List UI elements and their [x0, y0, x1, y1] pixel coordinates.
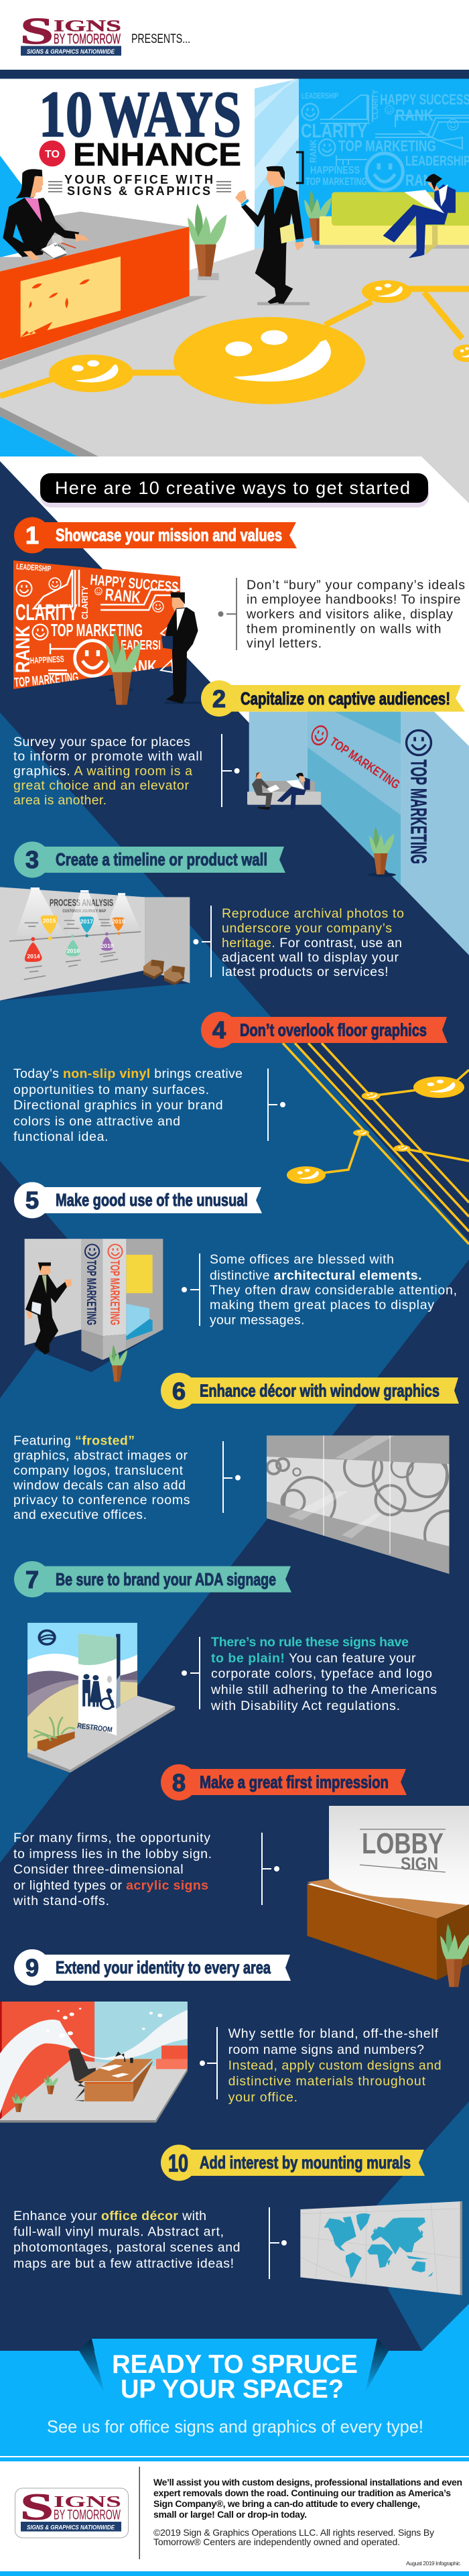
step 1 illustration: vinyl letter wall: RANK: [12, 625, 34, 673]
step 2 text: [13, 735, 202, 808]
step 10 text: full-wall vinyl murals. Abstract art,: [13, 2225, 224, 2240]
footer message: small or large! Call or drop-in today.: [153, 2509, 307, 2520]
step 9 text: [228, 2026, 442, 2105]
main title: YOUR OFFICE WITH: [64, 173, 213, 186]
step 4 connector: [267, 1068, 285, 1141]
year markers: 2016: [67, 947, 80, 954]
process analysis heading: PROCESS ANALYSIS: [50, 898, 113, 909]
footer logo card: SIGNS & GRAPHICS NATIONWIDE: [27, 2524, 115, 2531]
step 3 connector: [193, 906, 212, 977]
step 1 banner: 1: [25, 522, 39, 549]
step 8 illustration: lobby sign: SIGN: [401, 1853, 438, 1874]
step 6 text: graphics, abstract images or: [13, 1448, 188, 1463]
floor: [0, 237, 469, 503]
footer stripes: [0, 2457, 469, 2576]
year markers: 2015: [43, 917, 56, 924]
footer divider: [139, 2467, 140, 2559]
step 7 text: There’s no rule these signs have: [211, 1635, 409, 1650]
plant by elevator: [368, 826, 396, 877]
step 6 text: privacy to conference rooms: [13, 1493, 190, 1508]
step 7 text: [210, 1635, 437, 1713]
copyright: [153, 2527, 434, 2547]
couch with two people: [247, 772, 321, 810]
step 4 banner: [201, 1012, 448, 1048]
step 4 text: opportunities to many surfaces.: [13, 1083, 209, 1097]
step 8 text: For many firms, the opportunity: [13, 1831, 210, 1845]
step 7 connector: [182, 1637, 200, 1709]
step 5 illustration: architectural column: TOP MARKETING: [107, 1260, 121, 1325]
step 3 text: underscore your company’s: [222, 921, 392, 936]
wall graphic: LEADERSHIP: [302, 91, 338, 101]
step 6 banner: 6: [172, 1377, 186, 1405]
step 9 text: Instead, apply custom designs and: [228, 2059, 442, 2073]
main title: SIGNS & GRAPHICS: [67, 184, 210, 198]
main title: TO: [45, 149, 60, 160]
header logo: BY TOMORROW: [54, 32, 121, 47]
step 5 text: [210, 1252, 457, 1327]
step 4 text: Directional graphics in your brand: [13, 1098, 223, 1113]
subtitle pill: Here are 10 creative ways to get started: [55, 478, 410, 498]
step 9 text: distinctive materials throughout: [228, 2074, 426, 2089]
step 3 text: adjacent wall to display your: [222, 950, 399, 965]
receptionist: [3, 169, 90, 260]
footer logo card: IGNS: [54, 2494, 121, 2511]
step 5 banner: [14, 1182, 262, 1219]
step 5 text: your messages.: [210, 1312, 304, 1327]
step 10 banner: [161, 2145, 425, 2181]
step 10 text: photomontages, pastoral scenes and: [13, 2240, 240, 2255]
step 2 text: great choice and an elevator: [13, 778, 189, 793]
presents label: PRESENTS...: [131, 32, 190, 46]
step 10 illustration: world map mural: [300, 2201, 462, 2295]
step 8 text: with stand-offs.: [13, 1894, 109, 1908]
step 1 illustration: vinyl letter wall: EADERSI: [121, 638, 161, 653]
step 1 text: workers and visitors alike, display: [246, 607, 453, 621]
footer message: We’ll assist you with custom designs, professional installations and even: [153, 2477, 462, 2488]
step 5 text: distinctive architectural elements.: [210, 1268, 422, 1283]
step 7 text: to be plain! You can feature your: [211, 1651, 416, 1666]
step 1 illustration: vinyl letter wall: [12, 560, 202, 705]
step 1 illustration: vinyl letter wall: RANK: [104, 585, 141, 607]
step 7 banner: Be sure to brand your ADA signage: [56, 1569, 276, 1589]
step 2 banner: [201, 680, 465, 717]
red wall lettering: [310, 724, 402, 792]
step 1 banner: Showcase your mission and values: [56, 525, 282, 545]
wall graphic: RANK: [308, 139, 318, 163]
call-to-action panel: READY TO SPRUCE: [112, 2350, 358, 2379]
step 6 banner: [161, 1373, 459, 1409]
year markers: 2019: [112, 918, 125, 925]
step 5 banner: Make good use of the unusual: [56, 1190, 248, 1210]
step 7 text: corporate colors, typeface and logo: [211, 1666, 432, 1681]
step 3 text: Reproduce archival photos to: [222, 906, 404, 921]
step 1 text: Don’t “bury” your company’s ideals: [247, 578, 465, 593]
step 8 text: [13, 1831, 212, 1908]
step 9 banner: 9: [25, 1954, 39, 1981]
wall graphic: TOP MARKETING: [338, 137, 436, 154]
step 2 text: graphics. A waiting room is a: [13, 764, 192, 779]
step 1 text: [246, 578, 465, 651]
step 7 illustration: ADA sign: RESTROOM: [76, 1722, 113, 1734]
step 2 text: Survey your space for places: [13, 735, 190, 749]
step 3 text: [222, 906, 404, 979]
continents: [324, 2213, 433, 2278]
step 10 banner: 10: [168, 2149, 188, 2177]
step 6 text: company logos, translucent: [13, 1463, 184, 1478]
step 2 text: to inform or promote with wall: [13, 749, 202, 764]
footer message: expert removals down the road. Continuing our tradition as America’s: [153, 2488, 451, 2498]
call-to-action panel: See us for office signs and graphics of every type!: [47, 2416, 423, 2437]
step 5 connector: [182, 1253, 200, 1326]
main title: ENHANCE: [73, 137, 241, 173]
step 4 floor graphic lines and smileys: [283, 1043, 469, 1244]
step 1 banner: [14, 517, 297, 554]
step 3 text: latest products or services!: [222, 965, 389, 979]
step 9 text: Why settle for bland, off-the-shelf: [228, 2026, 439, 2041]
step 1 illustration: vinyl letter wall: TOP MARKETING: [14, 670, 79, 690]
subtitle pill: [40, 473, 429, 507]
step 4 text: functional idea.: [13, 1129, 109, 1144]
step 3 banner: Create a timeline or product wall: [56, 849, 267, 869]
year markers: [25, 916, 125, 962]
step 8 illustration: lobby sign: [307, 1806, 469, 1987]
step 5 text: Some offices are blessed with: [210, 1252, 394, 1267]
navy wall lettering: TOP MARKETING: [406, 759, 431, 864]
step 5 text: making them great places to display: [210, 1298, 434, 1312]
bracket: [296, 152, 303, 183]
step 1 connector: [218, 578, 237, 650]
wall graphic: CLARITY: [301, 121, 367, 142]
couch with seated man: [304, 174, 469, 258]
step 7 banner: [14, 1561, 291, 1597]
wall graphic: CLARITY: [371, 90, 380, 119]
wall graphic: RANK: [395, 107, 434, 125]
footer message: Sign Company®, we bring a can-do attitude to every challenge,: [153, 2498, 420, 2509]
reception desk: [0, 212, 208, 370]
step 10 banner: Add interest by mounting murals: [200, 2152, 411, 2172]
step 1 illustration: vinyl letter wall: CLARITY: [15, 600, 78, 625]
wall graphic: [255, 79, 469, 250]
step 1 illustration: vinyl letter wall: HAPPINESS: [29, 654, 64, 666]
step 3 banner: 3: [25, 846, 39, 873]
step 2 text: area is another.: [13, 793, 107, 808]
step 6 text: Featuring “frosted”: [13, 1433, 135, 1448]
wall graphic: TOP MARKETING: [306, 176, 367, 188]
step 6 illustration: frosted window: [267, 1436, 449, 1574]
hero scene: [0, 79, 469, 503]
step 4 text: Today’s non-slip vinyl brings creative: [13, 1066, 243, 1081]
spot lights: [15, 887, 141, 936]
footer logo card: [15, 2487, 129, 2538]
floor smileys: [0, 280, 469, 404]
year markers: 2017: [80, 918, 93, 924]
footer message: [153, 2477, 462, 2520]
year markers: 2014: [27, 953, 40, 960]
header logo: S: [20, 11, 54, 52]
step 8 banner: Make a great first impression: [200, 1772, 389, 1792]
step 5 banner: 5: [25, 1186, 39, 1214]
step 1 text: in employee handbooks! To inspire: [247, 593, 461, 607]
step 3 banner: [14, 842, 285, 878]
year markers: 2018: [100, 942, 114, 949]
header logo: SIGNS & GRAPHICS NATIONWIDE: [27, 48, 115, 56]
main title: [39, 78, 241, 198]
left blue panel: [0, 156, 55, 257]
step 9 banner: Extend your identity to every area: [56, 1957, 271, 1977]
red wall lettering: TOP MARKETING: [327, 735, 402, 792]
step 8 text: or lighted types or acrylic signs: [13, 1878, 208, 1893]
step 4 text: [13, 1066, 243, 1144]
header logo: [20, 11, 121, 56]
wall graphic: RAN: [405, 172, 432, 190]
main title: 10: [39, 78, 92, 151]
process analysis heading: [50, 898, 113, 914]
step 1 text: them prominently on walls with: [247, 622, 441, 637]
step 10 connector: [269, 2207, 287, 2279]
step 8 banner: [161, 1764, 407, 1800]
step 7 text: with Disability Act regulations.: [210, 1699, 400, 1713]
lobby plant: [188, 204, 226, 280]
step 2 banner: 2: [212, 685, 226, 713]
navy wall lettering: [406, 731, 431, 864]
step 8 banner: 8: [172, 1769, 186, 1796]
edition note: August 2019 Infographic: [406, 2560, 461, 2567]
step 6 connector: [222, 1441, 241, 1513]
footer logo card: BY TOMORROW: [54, 2507, 121, 2523]
step 2 connector: [221, 734, 240, 807]
step 6 text: window decals can also add: [13, 1478, 186, 1493]
step 8 connector: [261, 1833, 279, 1905]
footer logo card: S: [20, 2487, 54, 2528]
step 1 illustration: vinyl letter wall: HAPPY SUCCESS: [90, 571, 179, 595]
step 9 illustration: branded office: [0, 2002, 188, 2123]
step 10 text: [13, 2209, 240, 2271]
step 3 text: heritage. For contrast, use an: [222, 936, 402, 950]
timeline line: [9, 932, 141, 941]
step 1 illustration: vinyl letter wall: CLARITY: [80, 586, 90, 619]
step 7 banner: 7: [25, 1566, 39, 1593]
man beside wall: [161, 593, 202, 704]
call-to-action panel: UP YOUR SPACE?: [121, 2375, 344, 2404]
step 9 text: your office.: [228, 2090, 297, 2105]
standing man: [235, 166, 310, 305]
step 8 text: to impress lies in the lobby sign.: [13, 1847, 212, 1861]
step 4 text: colors is one attractive and: [13, 1114, 180, 1129]
call-to-action panel: [0, 2304, 469, 2456]
step 8 text: Consider three-dimensional: [13, 1862, 184, 1877]
armchairs: [143, 960, 185, 985]
step 10 text: Enhance your office décor with: [13, 2209, 206, 2223]
copyright: ©2019 Sign & Graphics Operations LLC. All rights reserved. Signs By: [153, 2527, 434, 2538]
step 8 illustration: lobby sign: LOBBY: [362, 1827, 444, 1860]
step 7 illustration: ADA sign: [27, 1623, 175, 1772]
step 6 text: and executive offices.: [13, 1508, 147, 1522]
step 9 text: room name signs and numbers?: [228, 2042, 424, 2057]
copyright: Tomorrow® Centers are independently owned and operated.: [153, 2536, 400, 2547]
step 6 text: [13, 1433, 190, 1522]
main title: WAYS: [99, 78, 241, 151]
step 4 banner: 4: [212, 1016, 226, 1044]
step 5 illustration: architectural column: [25, 1239, 163, 1382]
step 2 illustration: elevator area: [247, 712, 469, 955]
step 1 text: vinyl letters.: [247, 636, 322, 651]
step 3 illustration: timeline wall: [0, 887, 190, 1001]
navy header band: [0, 70, 469, 79]
step 5 illustration: architectural column: TOP MARKETING: [84, 1260, 98, 1325]
step 1 illustration: vinyl letter wall: LEADERSHIP: [16, 562, 52, 574]
process analysis heading: CUSTOMER JOURNEY MAP: [62, 909, 107, 914]
header logo: IGNS: [54, 17, 121, 35]
step 5 text: They often draw considerable attention,: [210, 1283, 457, 1298]
step 7 text: while still adhering to the Americans: [210, 1682, 437, 1697]
step 1 illustration: vinyl letter wall: ANK: [129, 656, 157, 677]
step 1 illustration: vinyl letter wall: TOP MARKETING: [51, 620, 143, 640]
step 9 connector: [200, 2027, 218, 2099]
step 9 banner: [14, 1949, 291, 1985]
wall graphic: HAPPINESS: [310, 165, 360, 176]
step 10 text: maps are but a few attractive ideas!: [13, 2256, 234, 2271]
